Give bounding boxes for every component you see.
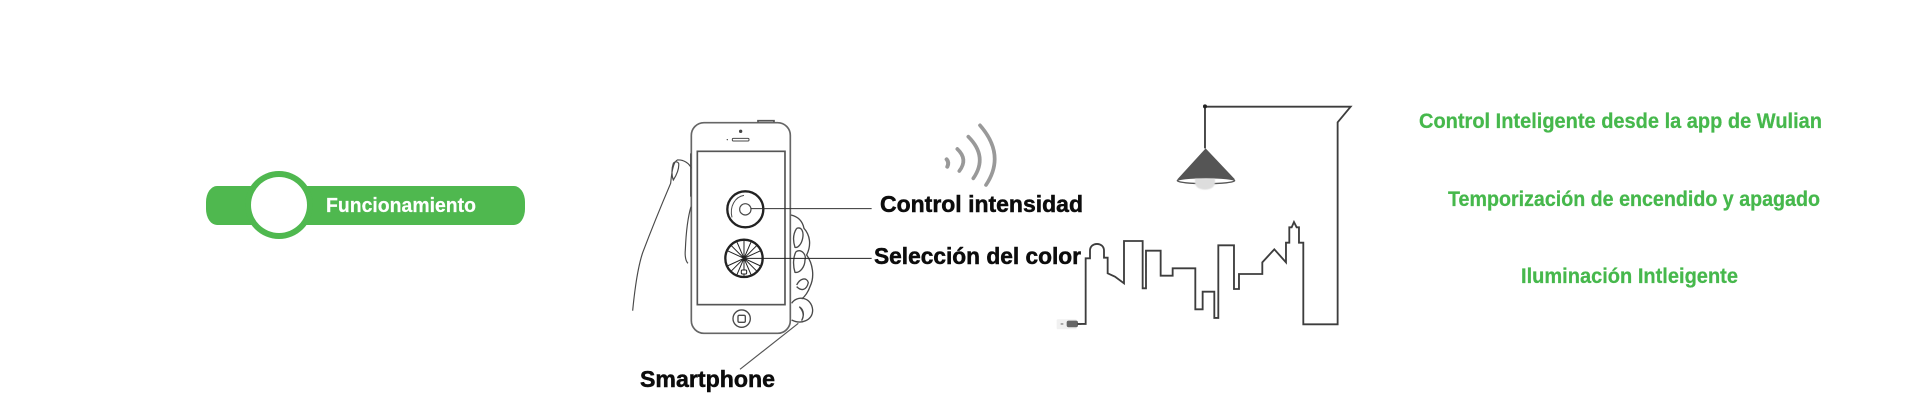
feature: timer: Temporización de encendido y apagado (1448, 188, 1820, 211)
phone body (691, 123, 790, 333)
lamp shade (1177, 148, 1235, 179)
feature: app control: Control Inteligente desde la app de Wulian (1419, 110, 1822, 133)
hand: thumb (633, 153, 691, 311)
feature: smart lighting: Iluminación Intleigente (1521, 265, 1738, 288)
label: Smartphone: Smartphone (640, 366, 775, 392)
label: Seleccion del color: Selección del color (874, 243, 1081, 269)
pendant lamp and skyline cable (1057, 104, 1351, 329)
skyline cable (1080, 107, 1351, 324)
icon: wireless signal (947, 125, 995, 185)
phone screen (697, 151, 785, 305)
leader line: smartphone (740, 323, 798, 369)
intensity dial (727, 191, 763, 227)
plug (1057, 319, 1081, 329)
color wheel (725, 240, 763, 277)
phone illustration with hand (633, 121, 872, 369)
leader line: control intensidad (751, 207, 872, 210)
feature list (1419, 110, 1822, 288)
hand: fingers (791, 215, 813, 322)
lamp bulb (1195, 179, 1215, 190)
phone power button (758, 121, 774, 122)
label: Control intensidad: Control intensidad (880, 191, 1083, 217)
leader line: seleccion del color (744, 257, 872, 260)
badge label: Funcionamiento (326, 195, 476, 217)
badge: Funcionamiento (206, 171, 525, 239)
phone home button (733, 310, 750, 327)
lamp mount (1203, 104, 1207, 108)
lamp rim (1177, 178, 1235, 184)
phone camera and speaker (727, 130, 749, 141)
